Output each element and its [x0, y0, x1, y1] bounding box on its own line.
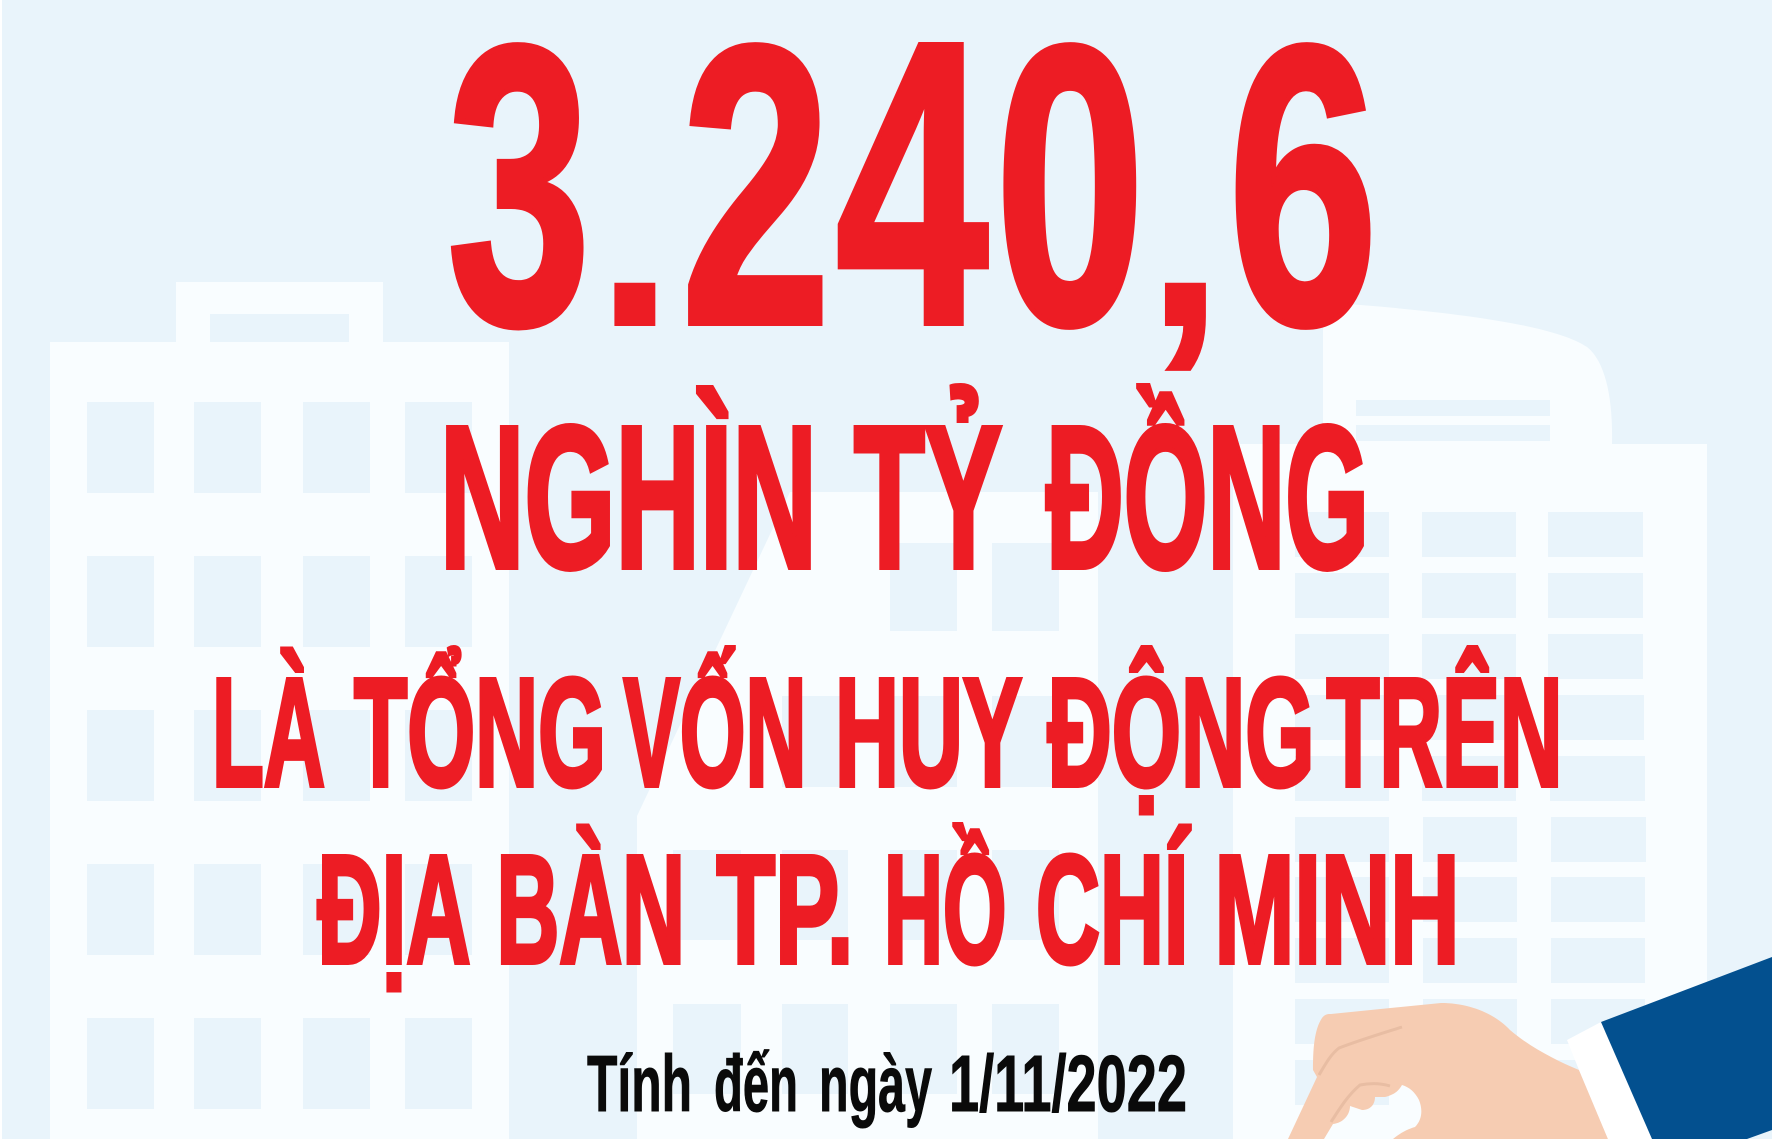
background: middle building — [637, 492, 1098, 1139]
date note: Tính đến ngày 1/11/2022: 1/11/2022 — [949, 1039, 1187, 1128]
heading: NGHÌN TỶ ĐỒNG: ĐỒNG — [1046, 384, 1369, 610]
heading: NGHÌN TỶ ĐỒNG: TỶ — [854, 384, 1002, 610]
subheading line 1: LÀ TỔNG VỐN HUY ĐỘNG TRÊN: ĐỘNG — [1048, 646, 1314, 818]
subheading line 1: LÀ TỔNG VỐN HUY ĐỘNG TRÊN: TRÊN — [1326, 646, 1562, 818]
subheading line 2: ĐỊA BÀN TP. HỒ CHÍ MINH: HỒ — [884, 824, 1006, 996]
subheading line 1: LÀ TỔNG VỐN HUY ĐỘNG TRÊN — [212, 646, 1562, 818]
subheading line 2: ĐỊA BÀN TP. HỒ CHÍ MINH: ĐỊA — [318, 824, 470, 996]
subheading line 2: ĐỊA BÀN TP. HỒ CHÍ MINH: TP. — [716, 824, 854, 996]
subheading line 2: ĐỊA BÀN TP. HỒ CHÍ MINH: MINH — [1214, 824, 1460, 996]
icon: hand with suit sleeve — [1288, 957, 1772, 1139]
subheading line 2: ĐỊA BÀN TP. HỒ CHÍ MINH: BÀN — [496, 824, 685, 996]
background: left building — [50, 282, 509, 1139]
subheading line 2: ĐỊA BÀN TP. HỒ CHÍ MINH: CHÍ — [1036, 824, 1191, 996]
big number: 3.240,6: . — [595, 64, 675, 388]
subheading line 1: LÀ TỔNG VỐN HUY ĐỘNG TRÊN: TỔNG — [354, 646, 606, 818]
subheading line 1: LÀ TỔNG VỐN HUY ĐỘNG TRÊN: LÀ — [212, 646, 325, 818]
background: right building — [1233, 302, 1707, 1139]
heading: NGHÌN TỶ ĐỒNG: NGHÌN — [440, 384, 817, 610]
subheading line 2: ĐỊA BÀN TP. HỒ CHÍ MINH — [318, 824, 1460, 996]
date note: Tính đến ngày 1/11/2022 — [587, 1039, 1187, 1128]
date note: Tính đến ngày 1/11/2022: ngày — [819, 1039, 932, 1128]
big number: 3.240,6 — [447, 0, 1378, 410]
subheading line 1: LÀ TỔNG VỐN HUY ĐỘNG TRÊN: HUY — [835, 646, 1022, 818]
date note: Tính đến ngày 1/11/2022: Tính — [587, 1039, 692, 1128]
subheading line 1: LÀ TỔNG VỐN HUY ĐỘNG TRÊN: VỐN — [624, 646, 806, 818]
big number: 3.240,6: , — [1145, 64, 1225, 388]
date note: Tính đến ngày 1/11/2022: đến — [714, 1039, 798, 1128]
